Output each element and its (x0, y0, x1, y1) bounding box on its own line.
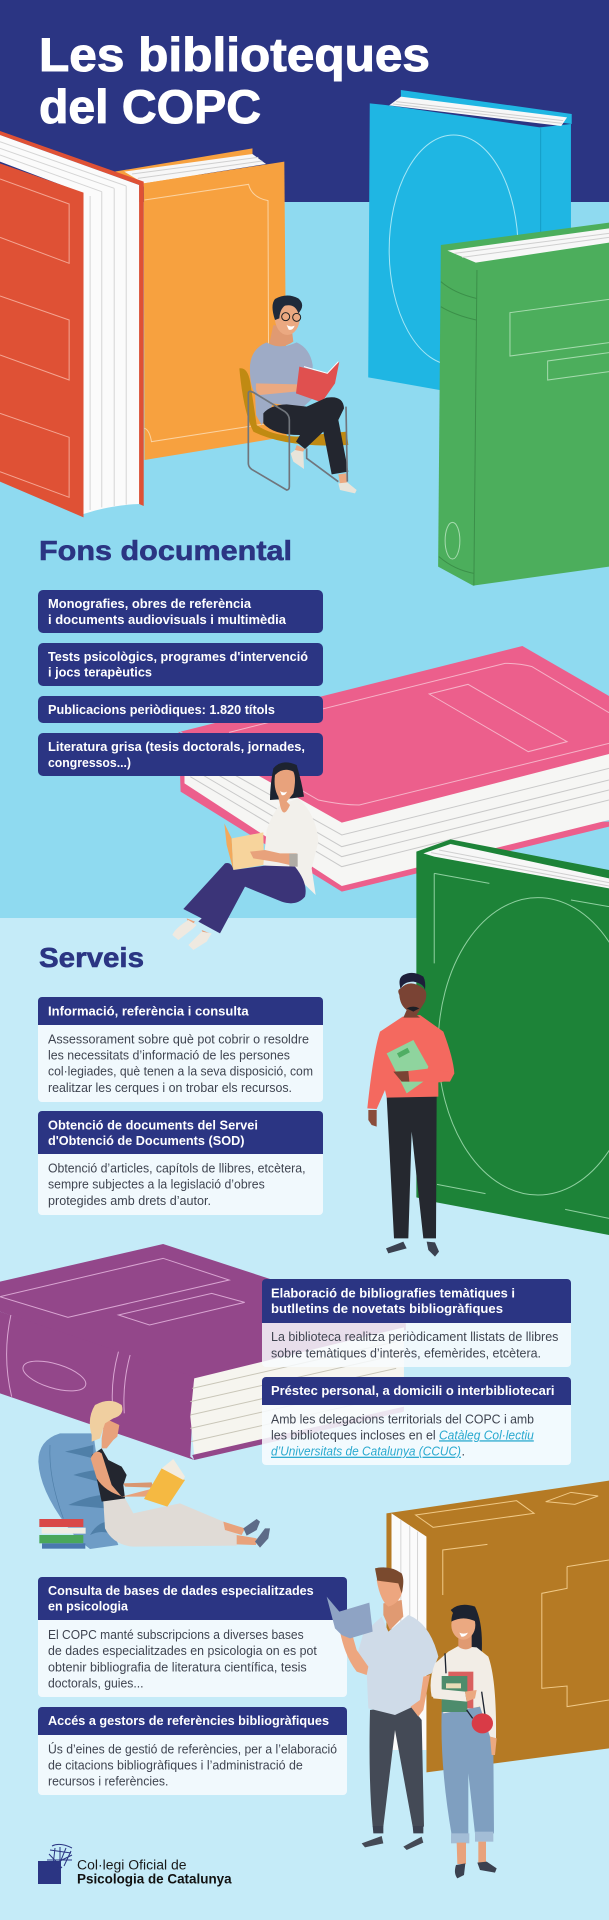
list: fons documental items (38, 590, 323, 776)
icon: logo mark (38, 1844, 72, 1884)
card: elaboració de bibliografies: butlletins de novetats bibliogràfiques (271, 1301, 503, 1316)
item: literatura grisa: Literatura grisa (tesis doctorals, jornades, (48, 739, 305, 754)
item: tests: i jocs terapèutics (48, 664, 152, 680)
book: brown (386, 1481, 609, 1772)
item: monografies (38, 590, 323, 633)
background: pale blue band (0, 918, 609, 1920)
man with blue book (327, 1567, 438, 1850)
card: informació, referència i consulta: Informació, referència i consulta (48, 1004, 249, 1018)
card: préstec personal (262, 1377, 571, 1465)
logo: COPC (38, 1844, 232, 1886)
item: monografies: i documents audiovisuals i multimèdia (48, 612, 287, 627)
card: informació, referència i consulta: realitzar les cerques i on trobar els recursos. (48, 1080, 292, 1095)
card: consulta de bases de dades: Consulta de bases de dades especialitzades (48, 1583, 314, 1598)
card: consulta de bases de dades (38, 1577, 347, 1697)
card: elaboració de bibliografies: Elaboració de bibliografies temàtiques i (271, 1286, 515, 1300)
card: elaboració de bibliografies: sobre temàtiques d’interès, efemèrides, etcètera. (271, 1345, 541, 1360)
book: orange standing (115, 148, 287, 460)
person: man reading on chair (239, 295, 357, 493)
card: préstec personal: Préstec personal, a domicili o interbibliotecari (271, 1383, 554, 1398)
book: red open-side (0, 131, 144, 517)
background: navy band (0, 0, 609, 202)
card: consulta de bases de dades: obtenir bibliografia de literatura científica, tesis (48, 1659, 307, 1674)
book: purple lying (0, 1244, 406, 1460)
card: accés a gestors de referències: de citacions bibliogràfiques i l’administració de (48, 1758, 303, 1773)
book: pink lying (179, 646, 609, 892)
card: préstec personal: d’Universitats de Catalunya (CCUC) (271, 1444, 461, 1459)
person: standing man with green folder (367, 973, 454, 1257)
card: obtenció de documents: protegides amb drets d’autor. (48, 1193, 211, 1208)
book: blue standing (368, 90, 572, 413)
title: Les biblioteques (39, 28, 430, 81)
book: green standing (438, 223, 609, 586)
logo: COPC: Psicologia de Catalunya (77, 1872, 232, 1886)
card: accés a gestors de referències: recursos i referències. (48, 1774, 168, 1789)
heading: Serveis: Serveis (39, 942, 144, 973)
person: woman on beanbag with books (38, 1401, 270, 1549)
card: accés a gestors de referències: Accés a gestors de referències bibliogràfiques (48, 1713, 329, 1728)
card: elaboració de bibliografies (262, 1279, 571, 1367)
card: préstec personal: les biblioteques incloses en el (271, 1427, 436, 1442)
title (39, 28, 430, 133)
background: mid blue band (0, 202, 609, 918)
title: del COPC (39, 80, 261, 133)
item: publicacions: Publicacions periòdiques: 1.820 títols (48, 702, 275, 717)
card: consulta de bases de dades: El COPC manté subscripcions a diverses bases (48, 1627, 304, 1642)
heading: Fons documental: Fons documental (39, 535, 292, 566)
card: obtenció de documents: Obtenció d’articles, capítols de llibres, etcètera, (48, 1161, 306, 1176)
card: obtenció de documents (38, 1111, 323, 1215)
card: obtenció de documents: sempre subjectes a la legislació d’obres (48, 1177, 265, 1192)
card: obtenció de documents: Obtenció de documents del Servei (48, 1118, 258, 1132)
card: informació, referència i consulta: les necessitats d’informació de les persones (48, 1048, 290, 1062)
woman with green books (431, 1605, 497, 1878)
card: préstec personal: Catàleg Col·lectiu (439, 1427, 534, 1442)
card: accés a gestors de referències: Ús d’eines de gestió de referències, per a l’elaboració (48, 1741, 337, 1756)
card: elaboració de bibliografies: La biblioteca realitza periòdicament llistats de llibres (271, 1329, 558, 1344)
person: woman sitting with book (172, 762, 318, 950)
item: literatura grisa: congressos...) (48, 755, 131, 770)
card: informació, referència i consulta (38, 997, 323, 1102)
card: consulta de bases de dades: doctorals, guies... (48, 1675, 144, 1690)
item: monografies: Monografies, obres de referència (48, 596, 252, 611)
book: dark green standing (416, 839, 609, 1235)
card: préstec personal: Amb les delegacions territorials del COPC i amb (271, 1411, 534, 1426)
item: literatura grisa (38, 733, 323, 776)
logo: COPC: Col·legi Oficial de (77, 1858, 186, 1872)
item: tests: Tests psicològics, programes d'intervenció (48, 649, 308, 664)
card: accés a gestors de referències (38, 1707, 347, 1795)
card: informació, referència i consulta: col·legiades, què tenen a la seva disposició, com (48, 1064, 313, 1079)
card: préstec personal: . (462, 1444, 465, 1459)
card: obtenció de documents: d'Obtenció de Documents (SOD) (48, 1133, 244, 1148)
card: informació, referència i consulta: Assessorament sobre què pot cobrir o resoldre (48, 1032, 309, 1046)
people: standing couple with books (327, 1567, 497, 1878)
card: consulta de bases de dades: de dades especialitzades en psicologia on es pot (48, 1643, 317, 1658)
item: publicacions (38, 696, 323, 723)
item: tests (38, 643, 323, 686)
card: consulta de bases de dades: en psicologia (48, 1598, 129, 1614)
